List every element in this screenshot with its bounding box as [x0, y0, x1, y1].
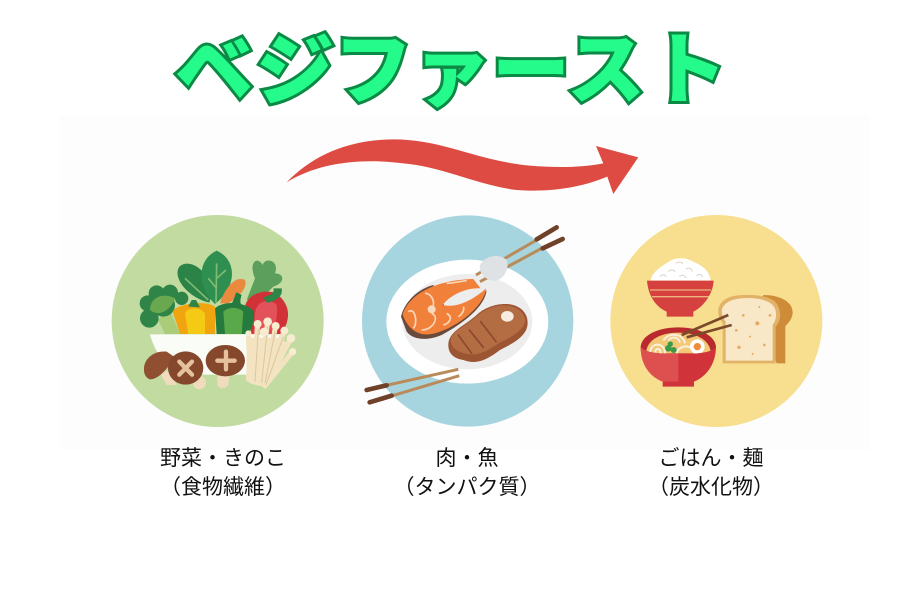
label: vegetables: （食物繊維） — [170, 476, 276, 499]
plate — [386, 260, 548, 384]
icon: shiitake mushrooms — [144, 345, 245, 389]
label: carbohydrates: （炭水化物） — [658, 476, 764, 499]
blue circle — [362, 215, 573, 427]
label: meat and fish: （タンパク質） — [404, 476, 530, 499]
panel: meat and fish — [362, 215, 573, 427]
label: vegetables: 野菜・きのこ — [160, 447, 286, 470]
title: ー — [492, 26, 570, 114]
icon: white bowl — [150, 334, 280, 375]
icon: noodle bowl — [641, 315, 732, 387]
title — [175, 26, 727, 116]
icon: green pepper — [215, 292, 254, 334]
icon: enoki mushrooms — [245, 317, 296, 386]
panel: vegetables and mushrooms — [112, 215, 324, 427]
arrow — [287, 139, 638, 194]
title: ァ — [413, 28, 491, 116]
title: ト — [649, 26, 727, 114]
green circle — [112, 215, 324, 427]
icon: yellow pepper — [173, 300, 215, 334]
icon: rice bowl — [647, 258, 714, 317]
label: carbohydrates: ごはん・麺 — [658, 447, 764, 470]
icon: upper chopsticks — [476, 227, 563, 282]
title: フ — [334, 26, 412, 114]
icon: leafy greens — [178, 251, 282, 304]
panel: rice and noodles — [610, 215, 822, 427]
icon: carrot — [220, 279, 246, 303]
icon: steak — [448, 304, 528, 362]
yellow circle — [610, 215, 822, 427]
icon: salmon — [401, 279, 487, 339]
label: meat and fish: 肉・魚 — [436, 447, 498, 470]
icon: lower chopsticks — [367, 369, 459, 402]
icon: bread — [718, 295, 793, 363]
icon: broccoli — [140, 285, 188, 334]
title: ス — [567, 26, 645, 114]
title: ベ — [175, 26, 253, 114]
title: ジ — [256, 27, 334, 115]
icon: red pepper — [245, 288, 288, 334]
